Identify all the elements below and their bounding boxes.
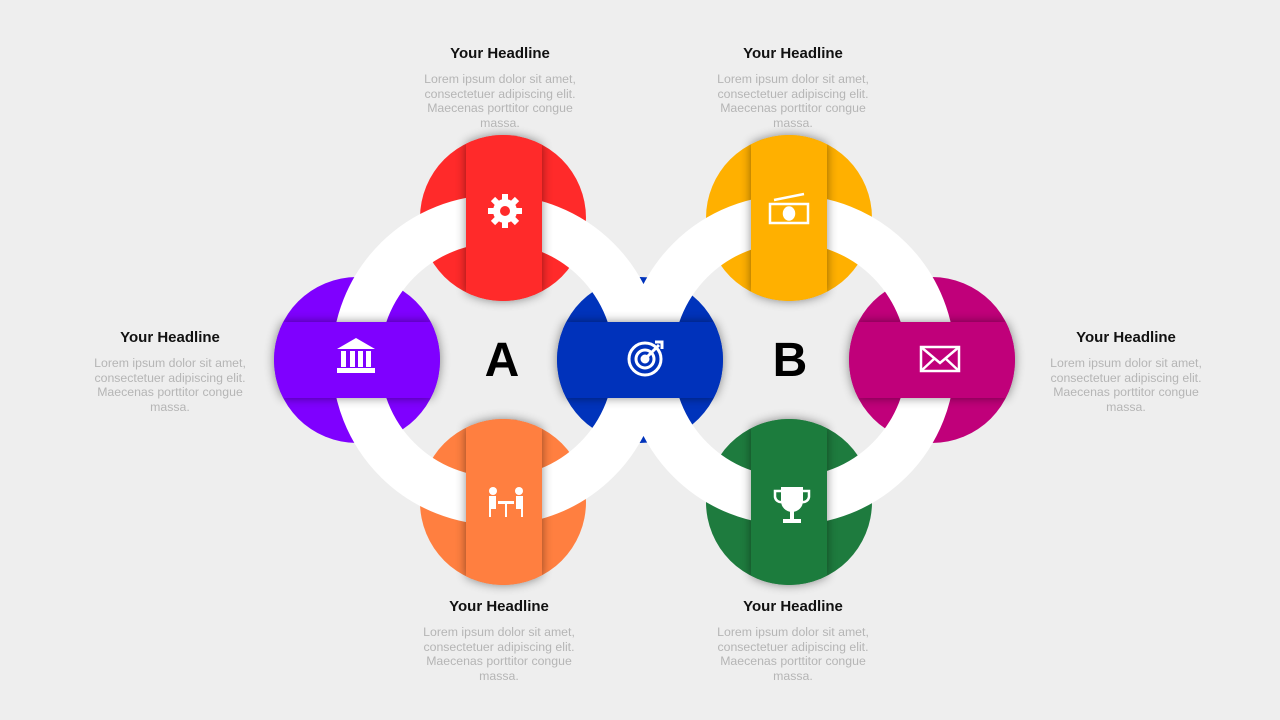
letter B: B [773,334,807,387]
text: top left: Lorem ipsum dolor sit amet, consectetuer adipiscing elit. Maecenas porttitor congue massa. [424,72,576,130]
diagram [267,128,1022,592]
icon: bank [337,338,375,373]
text: bottom right: Lorem ipsum dolor sit amet, consectetuer adipiscing elit. Maecenas porttitor congue massa. [717,625,869,682]
letter A: A [485,334,519,387]
text: left [94,329,246,414]
text: bottom right: Your Headline [743,598,843,615]
text: top right [717,45,869,130]
text: bottom left: Your Headline [449,598,549,615]
circles [274,135,1015,585]
icon: gear [488,194,522,228]
icon: trophy [775,487,809,523]
text: right: Lorem ipsum dolor sit amet, consectetuer adipiscing elit. Maecenas porttitor congue massa. [1050,356,1202,414]
rings [356,219,931,501]
icon: money [770,194,808,223]
text: top left: Your Headline [450,45,550,62]
text: top right: Lorem ipsum dolor sit amet, consectetuer adipiscing elit. Maecenas porttitor congue massa. [717,72,869,130]
text: left: Your Headline [120,329,220,346]
text: right: Your Headline [1076,329,1176,346]
text: top right: Your Headline [743,45,843,62]
icon: meeting [489,487,523,517]
text: bottom right [717,598,869,682]
text: left: Lorem ipsum dolor sit amet, consectetuer adipiscing elit. Maecenas porttitor congue massa. [94,356,246,414]
icon: mail [921,347,959,371]
text: bottom left [423,598,575,682]
icon: target [629,342,662,375]
text: right [1050,329,1202,414]
text: bottom left: Lorem ipsum dolor sit amet, consectetuer adipiscing elit. Maecenas porttitor congue massa. [423,625,575,682]
strips [270,130,1025,595]
text: top left [424,45,576,130]
